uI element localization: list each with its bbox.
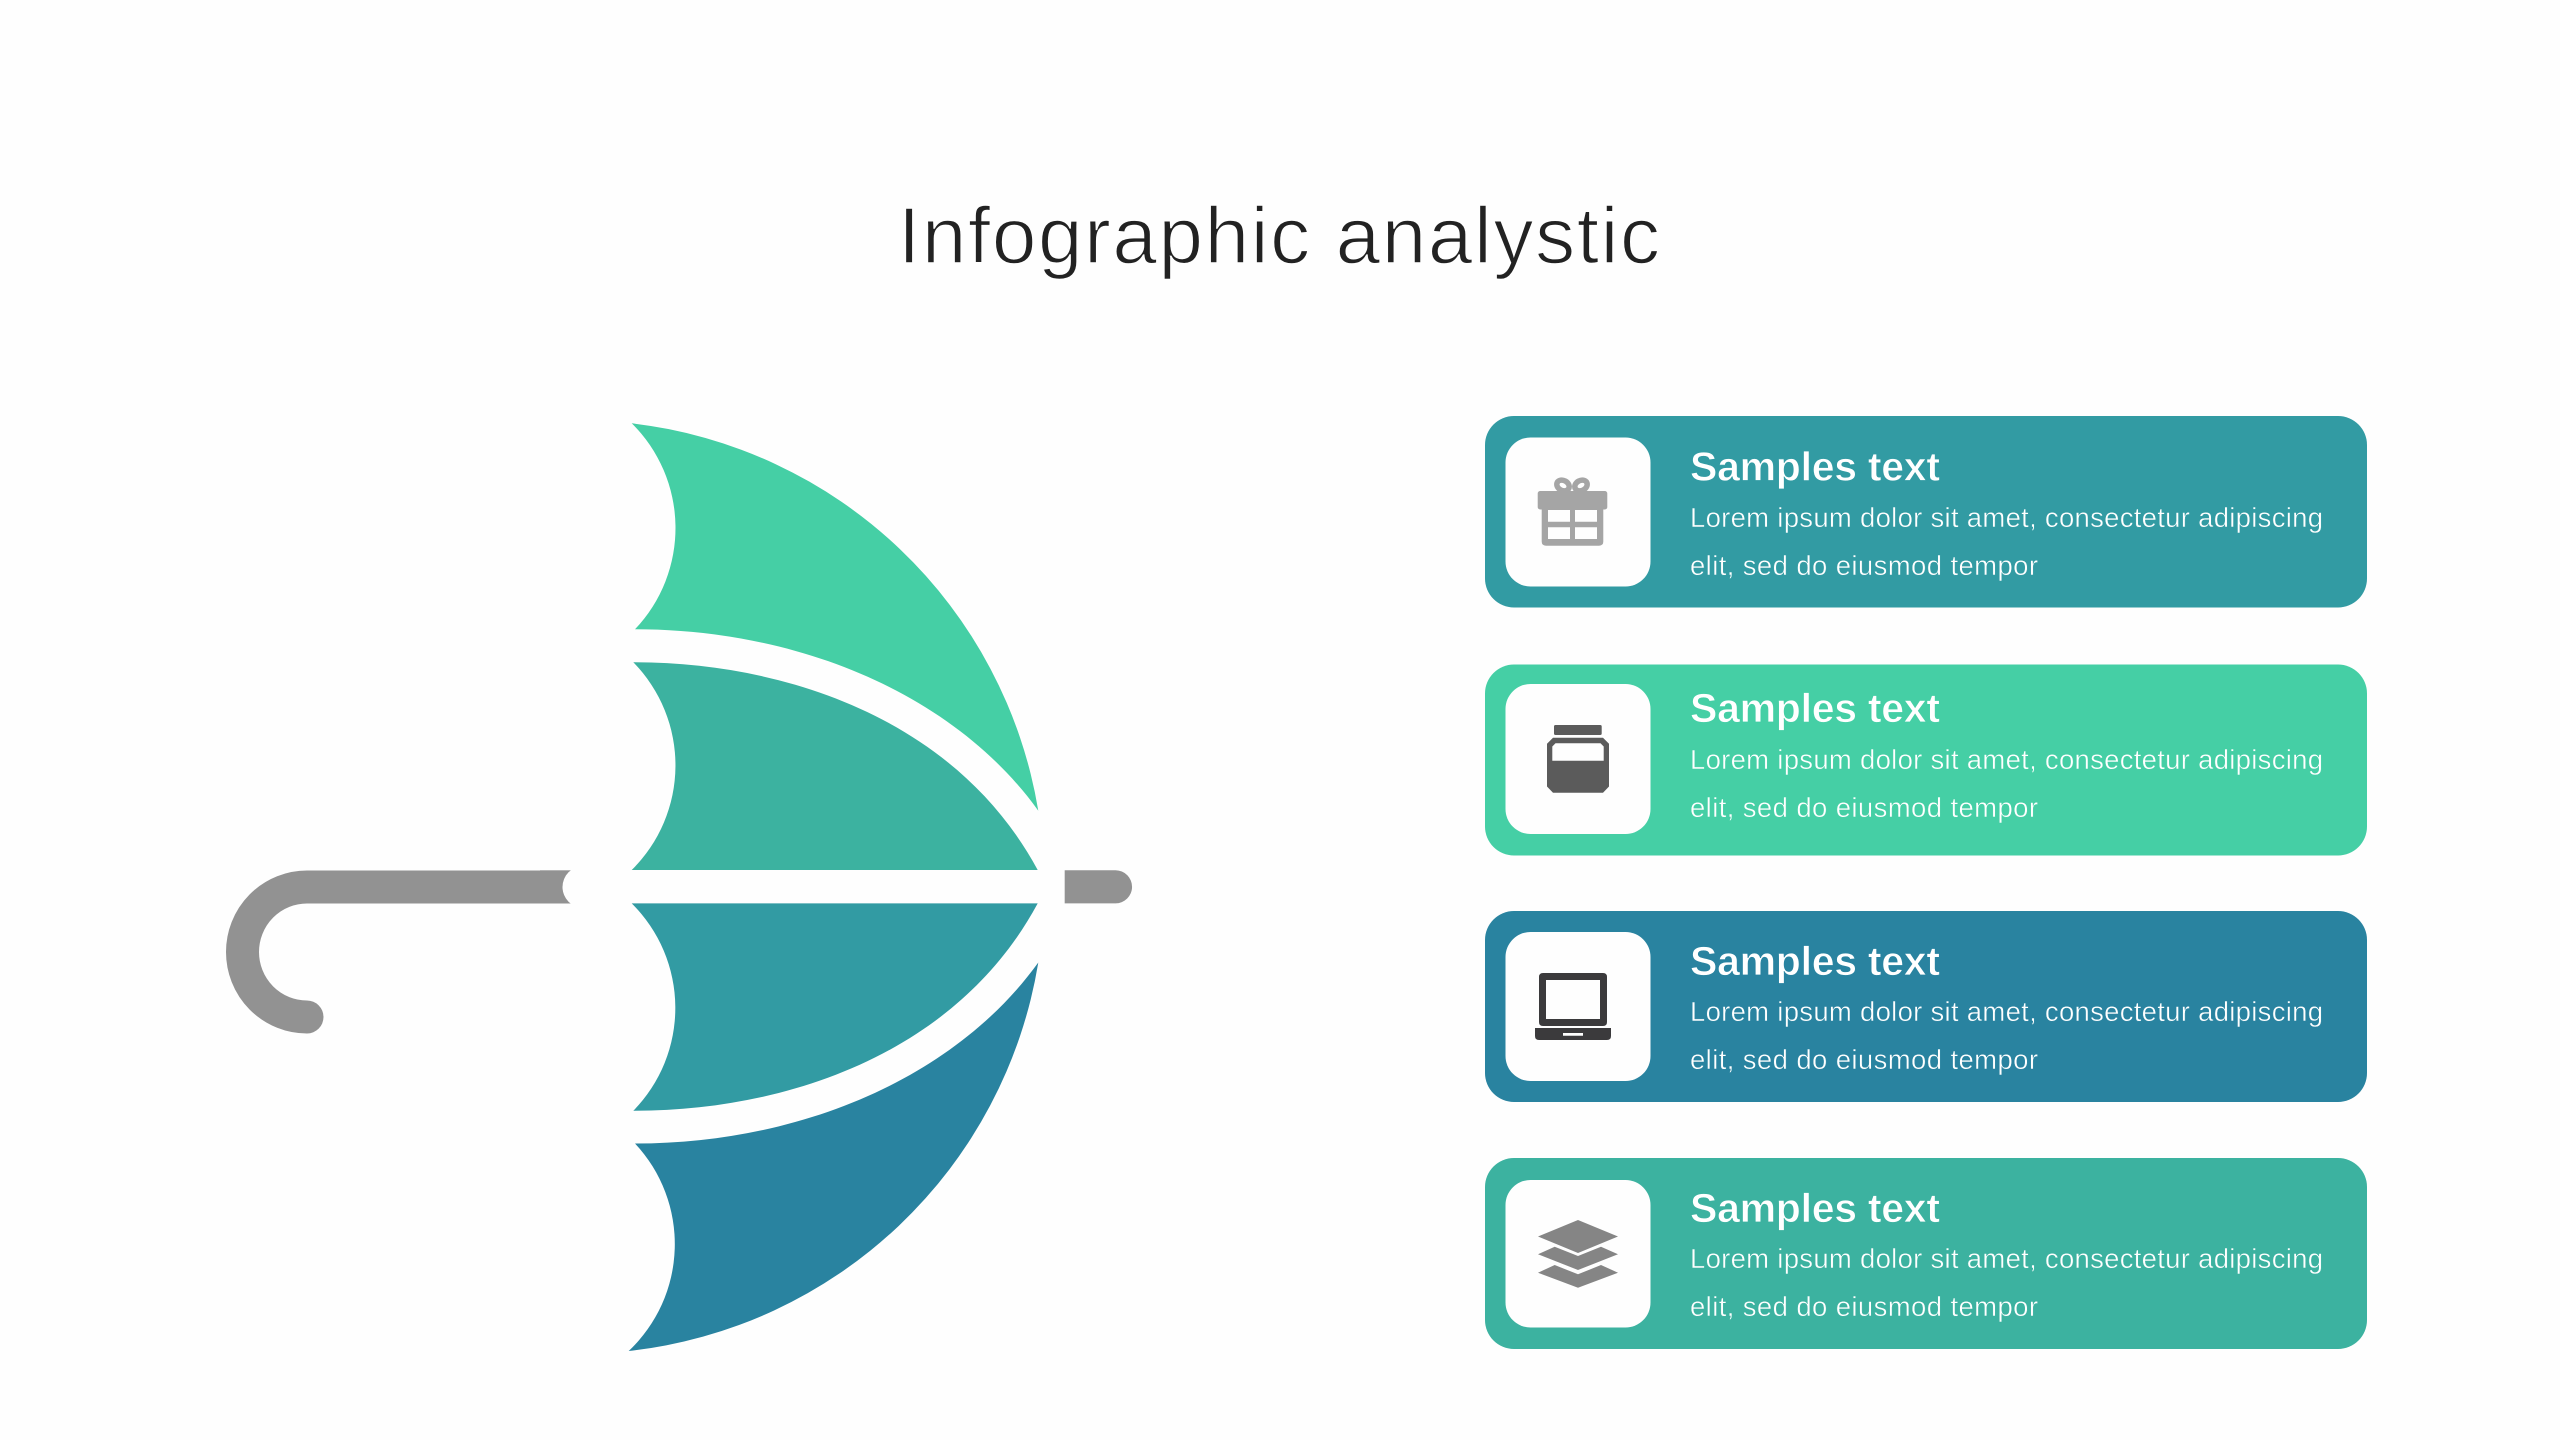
card 4 heading: Samples text xyxy=(1690,1185,1940,1231)
card 2 heading: Samples text xyxy=(1690,685,1940,731)
card 1 xyxy=(1485,416,2367,608)
title: Infographic analystic xyxy=(898,191,1660,280)
umbrella illustration xyxy=(242,423,1132,1351)
icon: laptop xyxy=(1535,973,1611,1040)
card 4 body text: Lorem ipsum dolor sit amet, consectetur adipiscing xyxy=(1690,1243,2323,1274)
card 1 heading: Samples text xyxy=(1690,444,1940,490)
canopy panel 4 xyxy=(629,962,1038,1351)
card 2 body text xyxy=(1690,744,2323,823)
card 4 xyxy=(1485,1158,2367,1349)
card 3 xyxy=(1485,911,2367,1102)
card 3 heading: Samples text xyxy=(1690,938,1940,984)
canopy panel 3 xyxy=(632,903,1038,1111)
umbrella handle xyxy=(242,866,604,1017)
card 3 body text: Lorem ipsum dolor sit amet, consectetur adipiscing xyxy=(1690,996,2323,1027)
card 3 body text: elit, sed do eiusmod tempor xyxy=(1690,1044,2038,1075)
card 1 body text: elit, sed do eiusmod tempor xyxy=(1690,550,2038,581)
card 2 body text: elit, sed do eiusmod tempor xyxy=(1690,792,2038,823)
card 4 body text: elit, sed do eiusmod tempor xyxy=(1690,1291,2038,1322)
icon: layers xyxy=(1538,1220,1618,1288)
icon: jar xyxy=(1547,725,1609,793)
card 3 body text xyxy=(1690,996,2323,1075)
icon: gift xyxy=(1538,478,1607,546)
umbrella tip xyxy=(1065,870,1132,903)
card 4 body text xyxy=(1690,1243,2323,1322)
card 1 body text xyxy=(1690,502,2323,581)
canopy panel 1 xyxy=(632,423,1038,811)
canopy panel 2 xyxy=(632,662,1038,870)
card 2 body text: Lorem ipsum dolor sit amet, consectetur adipiscing xyxy=(1690,744,2323,775)
card 2 xyxy=(1485,664,2367,856)
card 1 body text: Lorem ipsum dolor sit amet, consectetur adipiscing xyxy=(1690,502,2323,533)
